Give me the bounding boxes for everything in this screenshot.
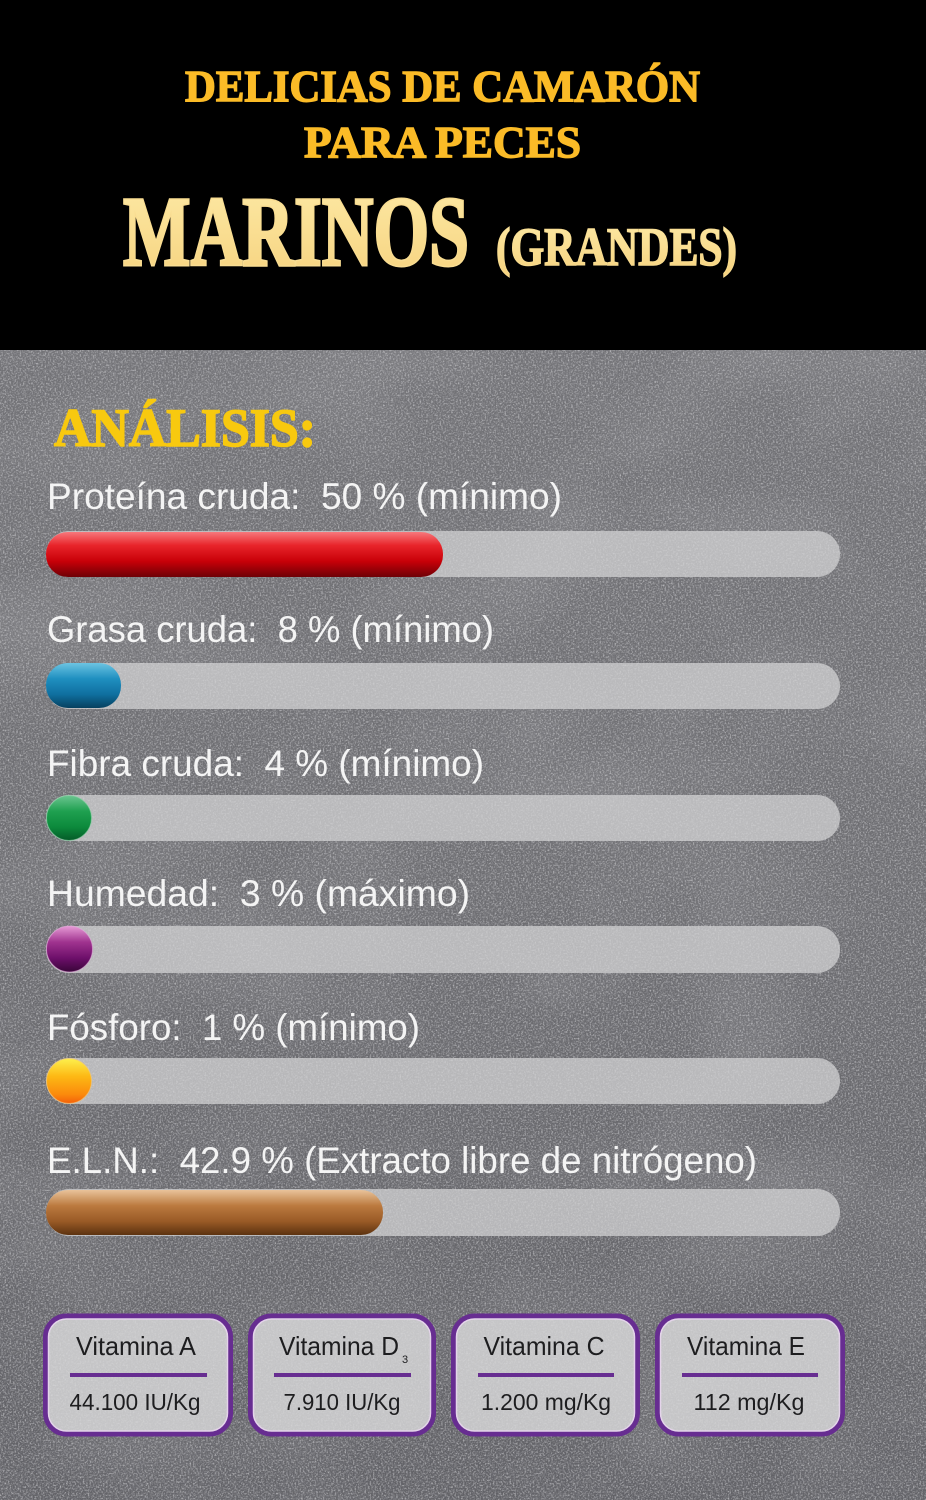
card: vitamina A	[46, 1316, 230, 1434]
label: Humedad: 3 % (máximo)	[47, 873, 470, 914]
title: marinos: MARINOS	[123, 176, 469, 287]
track	[46, 1189, 840, 1236]
panel: grasa cruda	[46, 609, 840, 709]
red fill	[46, 532, 443, 577]
title line 2: PARA PECES	[304, 118, 581, 167]
title: grandes: (GRANDES)	[496, 217, 737, 277]
orange fill	[46, 1058, 92, 1104]
card value: 112 mg/Kg	[694, 1389, 804, 1415]
card title: Vitamina D	[279, 1331, 399, 1361]
card value: 44.100 IU/Kg	[70, 1389, 200, 1415]
label: E.L.N.: 42.9 % (Extracto libre de nitrógeno)	[47, 1140, 757, 1181]
card value: 7.910 IU/Kg	[284, 1389, 400, 1415]
track	[46, 795, 840, 841]
title	[123, 62, 737, 287]
label: Fósforo: 1 % (mínimo)	[47, 1007, 420, 1048]
track	[46, 663, 840, 709]
card title: Vitamina C	[484, 1331, 604, 1361]
panel: fósforo	[46, 1007, 840, 1104]
card: vitamina D3	[250, 1316, 434, 1434]
brown fill	[46, 1190, 383, 1235]
card title: Vitamina E	[687, 1331, 805, 1361]
green fill	[46, 796, 92, 840]
panel: humedad	[46, 873, 840, 973]
heading: análisis: ANÁLISIS:	[54, 398, 316, 458]
subscript 3: 3	[402, 1354, 408, 1366]
card divider	[70, 1373, 207, 1377]
concrete background	[0, 350, 926, 1500]
label: Fibra cruda: 4 % (mínimo)	[47, 743, 484, 784]
card title: Vitamina A	[76, 1331, 197, 1361]
blue fill	[46, 663, 121, 708]
track	[46, 531, 840, 577]
header band	[0, 0, 926, 350]
card divider	[682, 1373, 818, 1377]
track	[46, 926, 840, 973]
title line 1: DELICIAS DE CAMARÓN	[185, 62, 700, 111]
card: vitamina C	[454, 1316, 638, 1434]
card: vitamina E	[658, 1316, 842, 1434]
card value: 1.200 mg/Kg	[481, 1389, 611, 1415]
label: Proteína cruda: 50 % (mínimo)	[47, 476, 562, 517]
panel: e.l.n.	[46, 1140, 840, 1236]
track	[46, 1058, 840, 1104]
purple fill	[46, 926, 92, 972]
card divider	[478, 1373, 614, 1377]
card divider	[274, 1373, 411, 1377]
label: Grasa cruda: 8 % (mínimo)	[47, 609, 494, 650]
panel: fibra cruda	[46, 743, 840, 841]
panel: proteína cruda	[46, 476, 840, 577]
